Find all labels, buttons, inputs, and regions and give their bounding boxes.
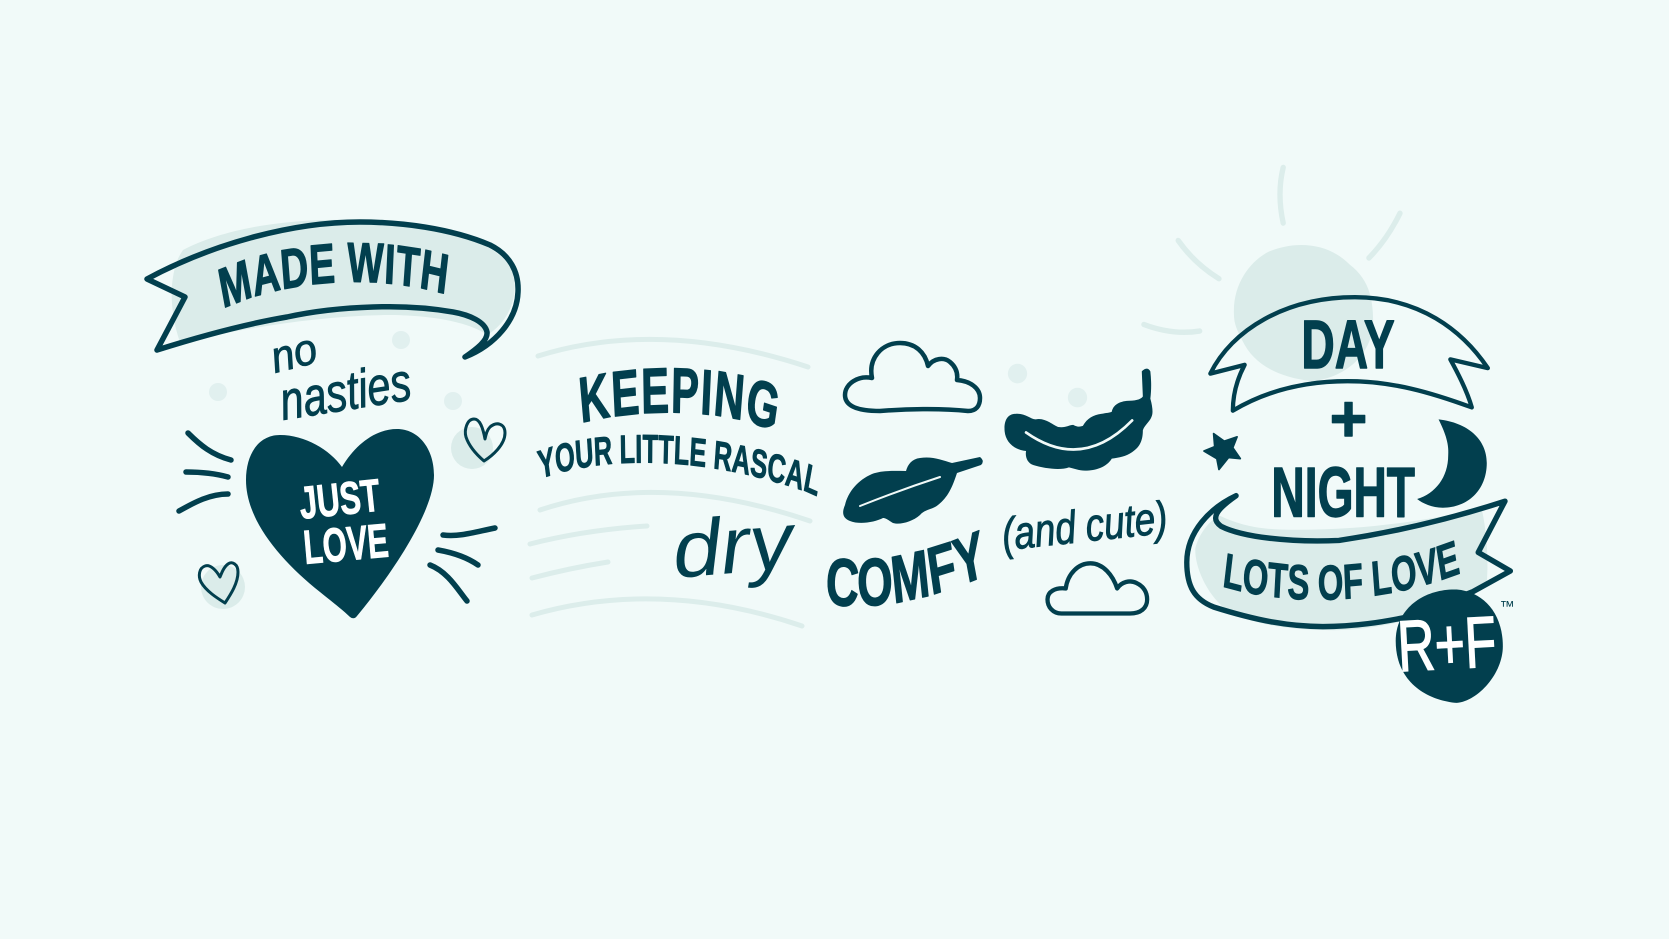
plus sign: + <box>1330 382 1367 455</box>
heading: day: DAY <box>1301 307 1395 383</box>
ribbon: lots of love <box>1184 492 1513 630</box>
icon: feather left <box>843 457 983 524</box>
icon: small heart right <box>451 419 505 469</box>
heart with just love <box>246 429 434 618</box>
heart with just love: LOVE <box>301 515 391 575</box>
icon: cloud large <box>845 343 980 411</box>
panel: made with just love <box>144 219 521 618</box>
panel: day and night <box>1141 164 1515 703</box>
ribbon: lots of love: LOTS OF LOVE <box>1224 540 1460 600</box>
heading: your little rascal: YOUR LITTLE RASCAL <box>536 434 818 496</box>
heart with just love: JUST <box>297 469 383 529</box>
panel: comfy and cute <box>827 340 1170 616</box>
icon: sun <box>1144 167 1400 381</box>
logo: R+F badge <box>1396 589 1515 703</box>
logo: R+F badge: ™ <box>1500 598 1515 615</box>
icon: feather right <box>1004 369 1152 471</box>
script text: and cute: (and cute) <box>999 491 1170 560</box>
logo: R+F badge: R+F <box>1396 602 1498 687</box>
script text: no nasties: no <box>266 324 322 383</box>
heading: comfy: COMFY <box>827 530 980 607</box>
background wind lines <box>530 339 810 626</box>
script text: no nasties <box>266 324 415 432</box>
decorative dots <box>1008 364 1087 407</box>
ribbon: day <box>1210 297 1488 411</box>
icon: moon <box>1417 419 1487 508</box>
ribbon: made with <box>144 219 521 360</box>
icon: cloud small <box>1048 563 1147 614</box>
feather, and cute, small cloud cluster <box>999 364 1170 614</box>
burst lines right <box>430 528 495 601</box>
script text: dry: dry <box>669 495 801 595</box>
icon: small heart left <box>199 563 245 609</box>
heading: night: NIGHT <box>1271 452 1415 532</box>
icon: star <box>1204 434 1240 470</box>
heading: keeping: KEEPING <box>580 368 778 428</box>
script text: no nasties: nasties <box>275 352 415 432</box>
panel: keeping your little rascal dry <box>528 337 818 628</box>
ribbon: made with: MADE WITH <box>218 242 448 308</box>
decorative dots <box>209 331 462 410</box>
burst lines left <box>179 433 231 511</box>
